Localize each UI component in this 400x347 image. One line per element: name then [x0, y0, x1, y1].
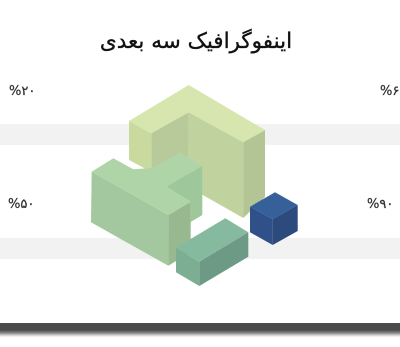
background band: upper: [0, 124, 400, 145]
label: 20 percent: %۲۰: [9, 84, 35, 99]
block: teal cuboid: [176, 218, 248, 286]
block: blue cube: [250, 192, 298, 245]
block: green T shape: [91, 152, 202, 266]
block: large light L shape: [129, 85, 265, 218]
label: 50 percent: %۵۰: [8, 197, 34, 212]
background band: lower: [0, 238, 400, 259]
label: 90 percent: %۹۰: [367, 197, 393, 212]
title: اینفوگرافیک سه بعدی: [100, 29, 292, 54]
bottom dark shadow bar: [0, 323, 400, 337]
